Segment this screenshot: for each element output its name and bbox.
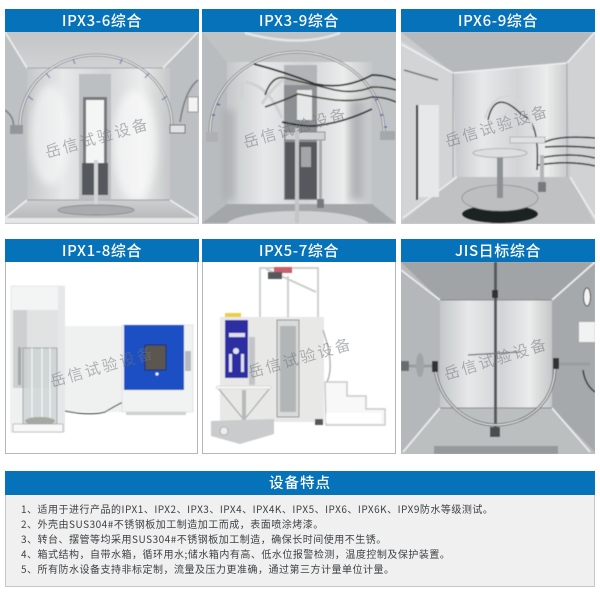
heading: 设备特点	[5, 471, 595, 495]
panel: JIS	[401, 239, 595, 454]
heading: IPX3-6	[5, 9, 199, 32]
heading: 设备特点: 设备特点	[269, 472, 331, 493]
heading: IPX3-9	[202, 9, 396, 32]
panel: IPX3-6	[5, 9, 199, 224]
list: features: 2、外壳由SUS304#不锈钢板加工制造加工而成，表面喷涂烤漆。	[21, 516, 324, 531]
heading: JIS	[401, 239, 595, 262]
photo: IPX5-7 machine	[202, 262, 396, 454]
panel: 设备特点	[5, 471, 595, 587]
photo: JIS chamber	[401, 262, 595, 454]
watermark: 岳信试验设备	[245, 332, 355, 383]
heading: JIS: JIS日标综合	[455, 240, 541, 261]
watermark: 岳信试验设备	[240, 102, 350, 153]
heading: IPX1-8: IPX1-8综合	[62, 240, 142, 261]
heading: IPX3-9: IPX3-9综合	[259, 10, 339, 31]
list: features	[21, 501, 493, 576]
panel: IPX1-8	[5, 239, 199, 454]
panel: IPX5-7	[202, 239, 396, 454]
list: features: 4、箱式结构，自带水箱，循环用水;储水箱内有高、低水位报警检测，温度控制及保护装置。	[21, 546, 450, 561]
photo: IPX6-9 chamber	[401, 32, 595, 224]
photo: IPX3-9 chamber	[202, 32, 396, 224]
list: features: 5、所有防水设备支持非标定制，流量及压力更准确，通过第三方计量单位计量。	[21, 561, 395, 576]
heading: IPX1-8	[5, 239, 199, 262]
watermark: 岳信试验设备	[442, 99, 552, 152]
heading: IPX3-6: IPX3-6综合	[62, 10, 142, 31]
watermark: 岳信试验设备	[47, 341, 157, 392]
heading: IPX6-9	[401, 9, 595, 32]
photo: IPX1-8 machine	[5, 262, 198, 454]
heading: IPX5-7: IPX5-7综合	[259, 240, 339, 261]
heading: IPX6-9: IPX6-9综合	[458, 10, 538, 31]
panel: IPX6-9	[401, 9, 595, 224]
list: features: 3、转台、摆管等均采用SUS304#不锈钢板加工制造，确保长时间使用不生锈。	[21, 531, 387, 546]
watermark: 岳信试验设备	[42, 112, 152, 163]
panel: IPX3-9	[202, 9, 396, 224]
watermark: 岳信试验设备	[441, 332, 551, 385]
photo: IPX3-6 chamber	[5, 32, 199, 224]
list: features: 1、适用于进行产品的IPX1、IPX2、IPX3、IPX4、IPX4K、IPX5、IPX6、IPX6K、IPX9防水等级测试。	[21, 501, 493, 516]
heading: IPX5-7	[202, 239, 396, 262]
